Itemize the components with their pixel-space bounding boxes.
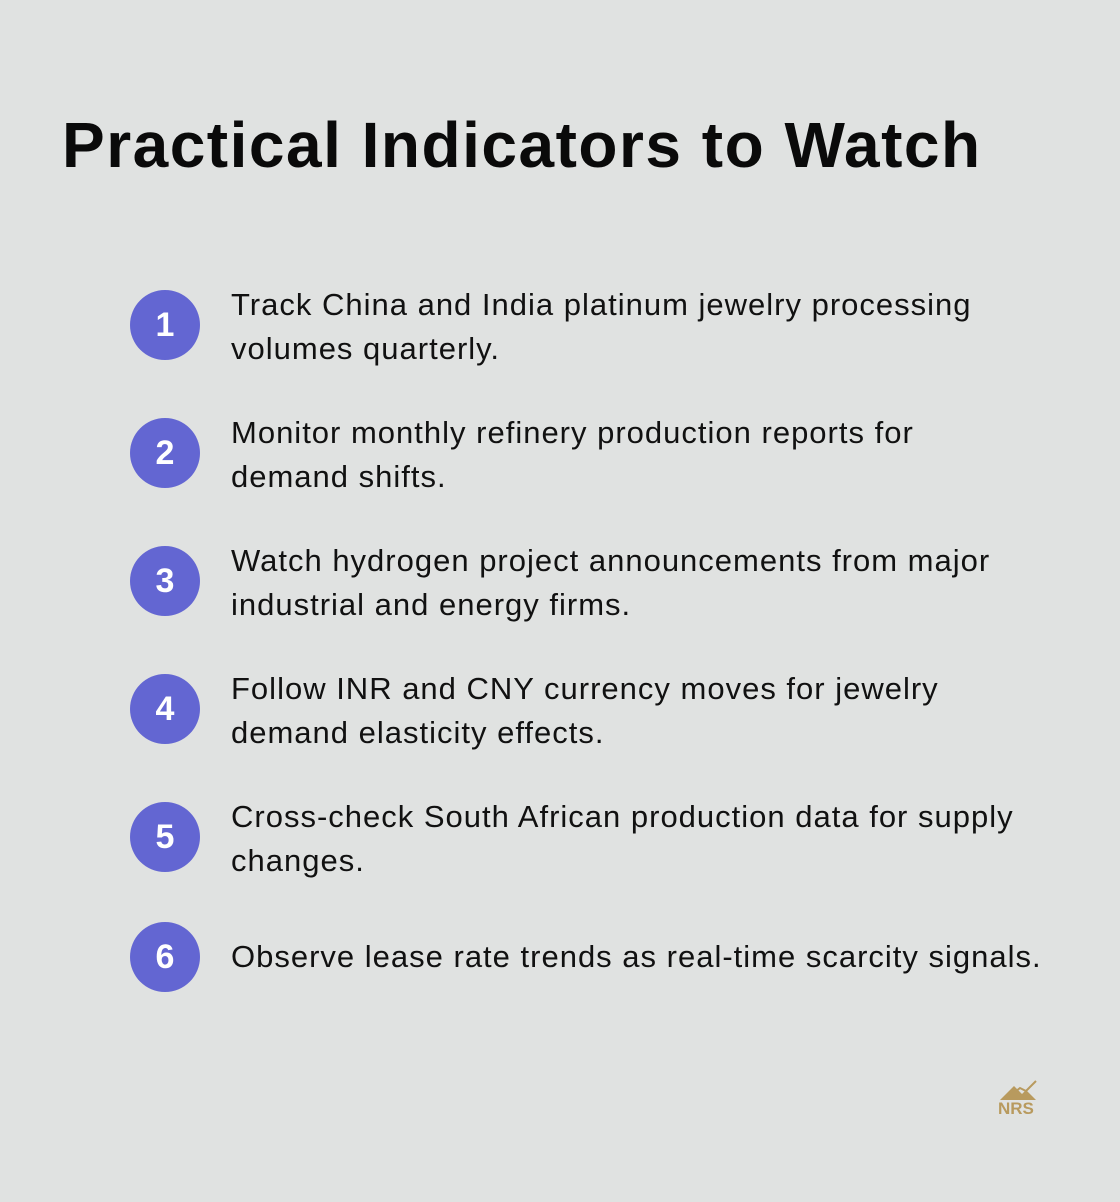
item 5 <box>130 799 1014 878</box>
item 4 <box>130 671 939 750</box>
item 3: 3 <box>156 562 174 600</box>
item 3 <box>130 543 990 622</box>
item 1: 1 <box>156 306 174 344</box>
item 1 <box>130 287 972 366</box>
item 5: 5 <box>156 818 174 856</box>
item 2: Monitor monthly refinery production reports for <box>231 415 914 450</box>
item 5: Cross-check South African production data for supply <box>231 799 1014 834</box>
title: Practical Indicators to Watch <box>62 109 982 181</box>
logo <box>998 1080 1037 1118</box>
item 2 <box>130 415 914 494</box>
item 5: changes. <box>231 843 365 878</box>
item 6 <box>130 922 1042 992</box>
item 4: demand elasticity effects. <box>231 715 604 750</box>
item 2: 2 <box>156 434 174 472</box>
item 1: Track China and India platinum jewelry processing <box>231 287 972 322</box>
item 2: demand shifts. <box>231 459 447 494</box>
item 4: Follow INR and CNY currency moves for jewelry <box>231 671 939 706</box>
item 6: Observe lease rate trends as real-time scarcity signals. <box>231 939 1042 974</box>
item 3: industrial and energy firms. <box>231 587 631 622</box>
item 4: 4 <box>156 690 174 728</box>
item 1: volumes quarterly. <box>231 331 500 366</box>
item 3: Watch hydrogen project announcements from major <box>231 543 990 578</box>
item 6: 6 <box>156 938 174 976</box>
logo: NRS <box>998 1099 1034 1118</box>
